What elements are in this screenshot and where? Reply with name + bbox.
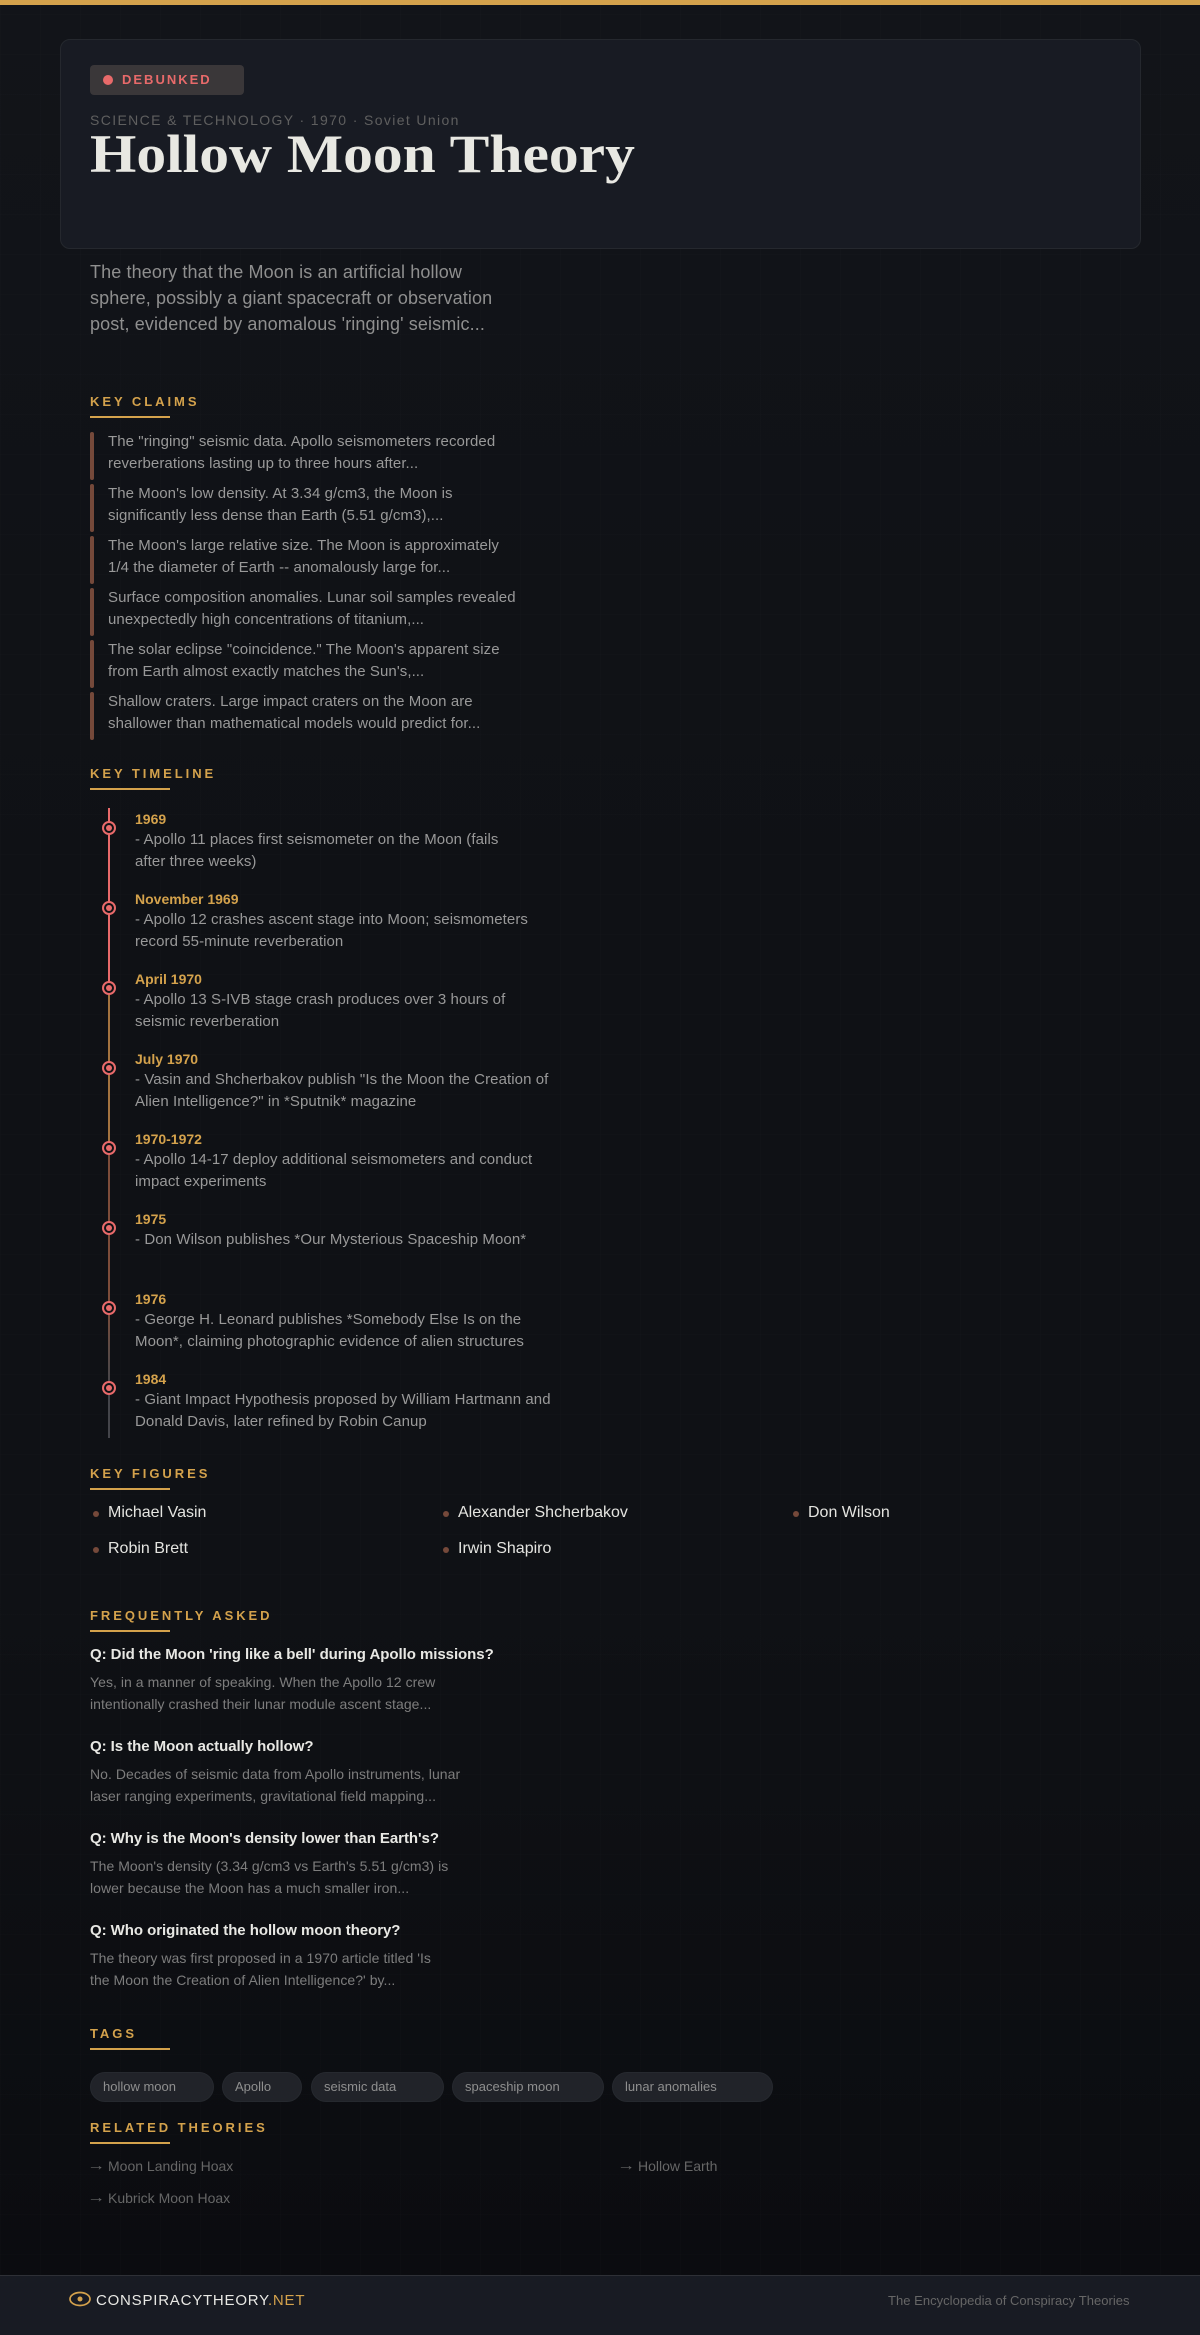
tag pills [90, 2072, 773, 2102]
event July 1970: July 1970 [135, 1051, 198, 1067]
panel: key claims [90, 394, 516, 740]
claim 4 [90, 588, 550, 636]
claim 2: The Moon's low density. At 3.34 g/cm3, the Moon is [108, 485, 453, 502]
event July 1970: Alien Intelligence?" in *Sputnik* magazine [135, 1093, 416, 1110]
faq 2: laser ranging experiments, gravitational field mapping... [90, 1788, 436, 1804]
faq 2: Q: Is the Moon actually hollow? [90, 1738, 313, 1755]
event 1970-1972: 1970-1972 [135, 1131, 202, 1147]
claim 2: significantly less dense than Earth (5.51 g/cm3),... [108, 507, 443, 524]
event July 1970 [135, 1051, 548, 1110]
claim 3 [90, 536, 550, 584]
event 1970-1972: impact experiments [135, 1173, 266, 1190]
timeline spine [108, 808, 110, 1438]
claim 5: from Earth almost exactly matches the Sun's,... [108, 663, 424, 680]
event April 1970: seismic reverberation [135, 1013, 279, 1030]
tag pills: spaceship moon [465, 2079, 560, 2094]
event November 1969: - Apollo 12 crashes ascent stage into Moon; seismometers [135, 911, 528, 928]
event 1984: - Giant Impact Hypothesis proposed by William Hartmann and [135, 1391, 551, 1408]
claim 1 [90, 432, 550, 480]
tag pills: hollow moon [103, 2079, 176, 2094]
faq 1: intentionally crashed their lunar module ascent stage... [90, 1696, 431, 1712]
figure: Don Wilson: Don Wilson [808, 1504, 890, 1521]
tag pills: Apollo [235, 2079, 271, 2094]
timeline markers [102, 821, 116, 1395]
claim 4: Surface composition anomalies. Lunar soil samples revealed [108, 589, 516, 606]
claim 6: shallower than mathematical models would predict for... [108, 715, 480, 732]
heading: related theories: RELATED THEORIES [90, 2120, 268, 2135]
event 1969: 1969 [135, 811, 166, 827]
panel: key figures [90, 1466, 890, 1557]
event 1970-1972: - Apollo 14-17 deploy additional seismometers and conduct [135, 1151, 532, 1168]
event April 1970: - Apollo 13 S-IVB stage crash produces over 3 hours of [135, 991, 505, 1008]
claim 1: The "ringing" seismic data. Apollo seismometers recorded [108, 433, 495, 450]
event 1984: Donald Davis, later refined by Robin Canup [135, 1413, 427, 1430]
link: Hollow Earth: Hollow Earth [638, 2158, 717, 2174]
heading: tags: TAGS [90, 2026, 137, 2041]
claim 1: reverberations lasting up to three hours after... [108, 455, 418, 472]
event April 1970 [135, 971, 506, 1030]
event April 1970: April 1970 [135, 971, 202, 987]
event 1975 [135, 1211, 526, 1248]
event November 1969: record 55-minute reverberation [135, 933, 343, 950]
event July 1970: - Vasin and Shcherbakov publish "Is the Moon the Creation of [135, 1071, 548, 1088]
figure: Irwin Shapiro: Irwin Shapiro [458, 1540, 551, 1557]
lead summary text: The theory that the Moon is an artificial hollow [90, 262, 462, 282]
claim 5: The solar eclipse "coincidence." The Moon's apparent size [108, 641, 500, 658]
faq 4: the Moon the Creation of Alien Intelligence?' by... [90, 1972, 395, 1988]
icon: status dot [103, 75, 113, 85]
event 1976: Moon*, claiming photographic evidence of alien structures [135, 1333, 524, 1350]
event 1976: - George H. Leonard publishes *Somebody Else Is on the [135, 1311, 521, 1328]
link: Hollow Earth: → [617, 2157, 635, 2173]
lead summary text [90, 262, 492, 334]
footer tagline: The Encyclopedia of Conspiracy Theories [888, 2293, 1130, 2308]
event 1969: - Apollo 11 places first seismometer on the Moon (fails [135, 831, 498, 848]
claim 4: unexpectedly high concentrations of titanium,... [108, 611, 424, 628]
faq 4: Q: Who originated the hollow moon theory? [90, 1922, 400, 1939]
claim 3: The Moon's large relative size. The Moon is approximately [108, 537, 499, 554]
title: Hollow Moon Theory [90, 124, 635, 184]
faq 1: Yes, in a manner of speaking. When the Apollo 12 crew [90, 1674, 435, 1690]
link: Kubrick Moon Hoax: → [87, 2189, 105, 2205]
event November 1969 [135, 891, 528, 950]
link: Kubrick Moon Hoax: Kubrick Moon Hoax [108, 2190, 230, 2206]
badge label: DEBUNKED [122, 72, 212, 87]
tag pills: lunar anomalies [625, 2079, 717, 2094]
figure: Michael Vasin: Michael Vasin [108, 1504, 206, 1521]
category meta line: SCIENCE & TECHNOLOGY · 1970 · Soviet Union [90, 112, 460, 128]
heading: frequently asked: FREQUENTLY ASKED [90, 1608, 273, 1623]
event November 1969: November 1969 [135, 891, 239, 907]
faq 2 [90, 1738, 460, 1804]
claim 2 [90, 484, 550, 532]
panel: key timeline [90, 766, 551, 1438]
event 1976: 1976 [135, 1291, 166, 1307]
faq 3: The Moon's density (3.34 g/cm3 vs Earth's 5.51 g/cm3) is [90, 1858, 448, 1874]
faq 4: The theory was first proposed in a 1970 article titled 'Is [90, 1950, 431, 1966]
claims list [90, 432, 516, 740]
faq 3 [90, 1830, 448, 1896]
claim 5 [90, 640, 550, 688]
faq 1 [90, 1646, 494, 1712]
icon: eye logo [69, 2292, 91, 2306]
panel: hero card [60, 39, 1141, 249]
claim 6: Shallow craters. Large impact craters on the Moon are [108, 693, 473, 710]
event 1970-1972 [135, 1131, 532, 1190]
event 1984: 1984 [135, 1371, 166, 1387]
claim 6 [90, 692, 550, 740]
heading: key figures: KEY FIGURES [90, 1466, 210, 1481]
link: Moon Landing Hoax: Moon Landing Hoax [108, 2158, 233, 2174]
event 1975: - Don Wilson publishes *Our Mysterious Spaceship Moon* [135, 1231, 526, 1248]
badge: debunked status [90, 65, 244, 95]
claim 3: 1/4 the diameter of Earth -- anomalously large for... [108, 559, 450, 576]
logo wordmark: CONSPIRACYTHEORY.NET [96, 2292, 305, 2309]
lead summary text: sphere, possibly a giant spacecraft or observation [90, 288, 492, 308]
footer [0, 2275, 1200, 2335]
lead summary text: post, evidenced by anomalous 'ringing' seismic... [90, 314, 485, 334]
figure: Alexander Shcherbakov: Alexander Shcherbakov [458, 1504, 628, 1521]
link: Moon Landing Hoax: → [87, 2157, 105, 2173]
event 1976 [135, 1291, 524, 1350]
panel: frequently asked [90, 1608, 494, 1988]
top accent bar [0, 0, 1200, 5]
event 1975: 1975 [135, 1211, 166, 1227]
heading: key timeline: KEY TIMELINE [90, 766, 216, 781]
faq 3: Q: Why is the Moon's density lower than Earth's? [90, 1830, 439, 1847]
event 1984 [135, 1371, 551, 1430]
faq 1: Q: Did the Moon 'ring like a bell' during Apollo missions? [90, 1646, 494, 1663]
event 1969 [135, 811, 498, 870]
faq 2: No. Decades of seismic data from Apollo instruments, lunar [90, 1766, 460, 1782]
faq 3: lower because the Moon has a much smaller iron... [90, 1880, 409, 1896]
faq 4 [90, 1922, 431, 1988]
panel: related theories [87, 2120, 717, 2206]
heading: key claims: KEY CLAIMS [90, 394, 199, 409]
event 1969: after three weeks) [135, 853, 256, 870]
tag pills: seismic data [324, 2079, 396, 2094]
panel: tags [90, 2026, 773, 2102]
figure: Robin Brett: Robin Brett [108, 1540, 188, 1557]
